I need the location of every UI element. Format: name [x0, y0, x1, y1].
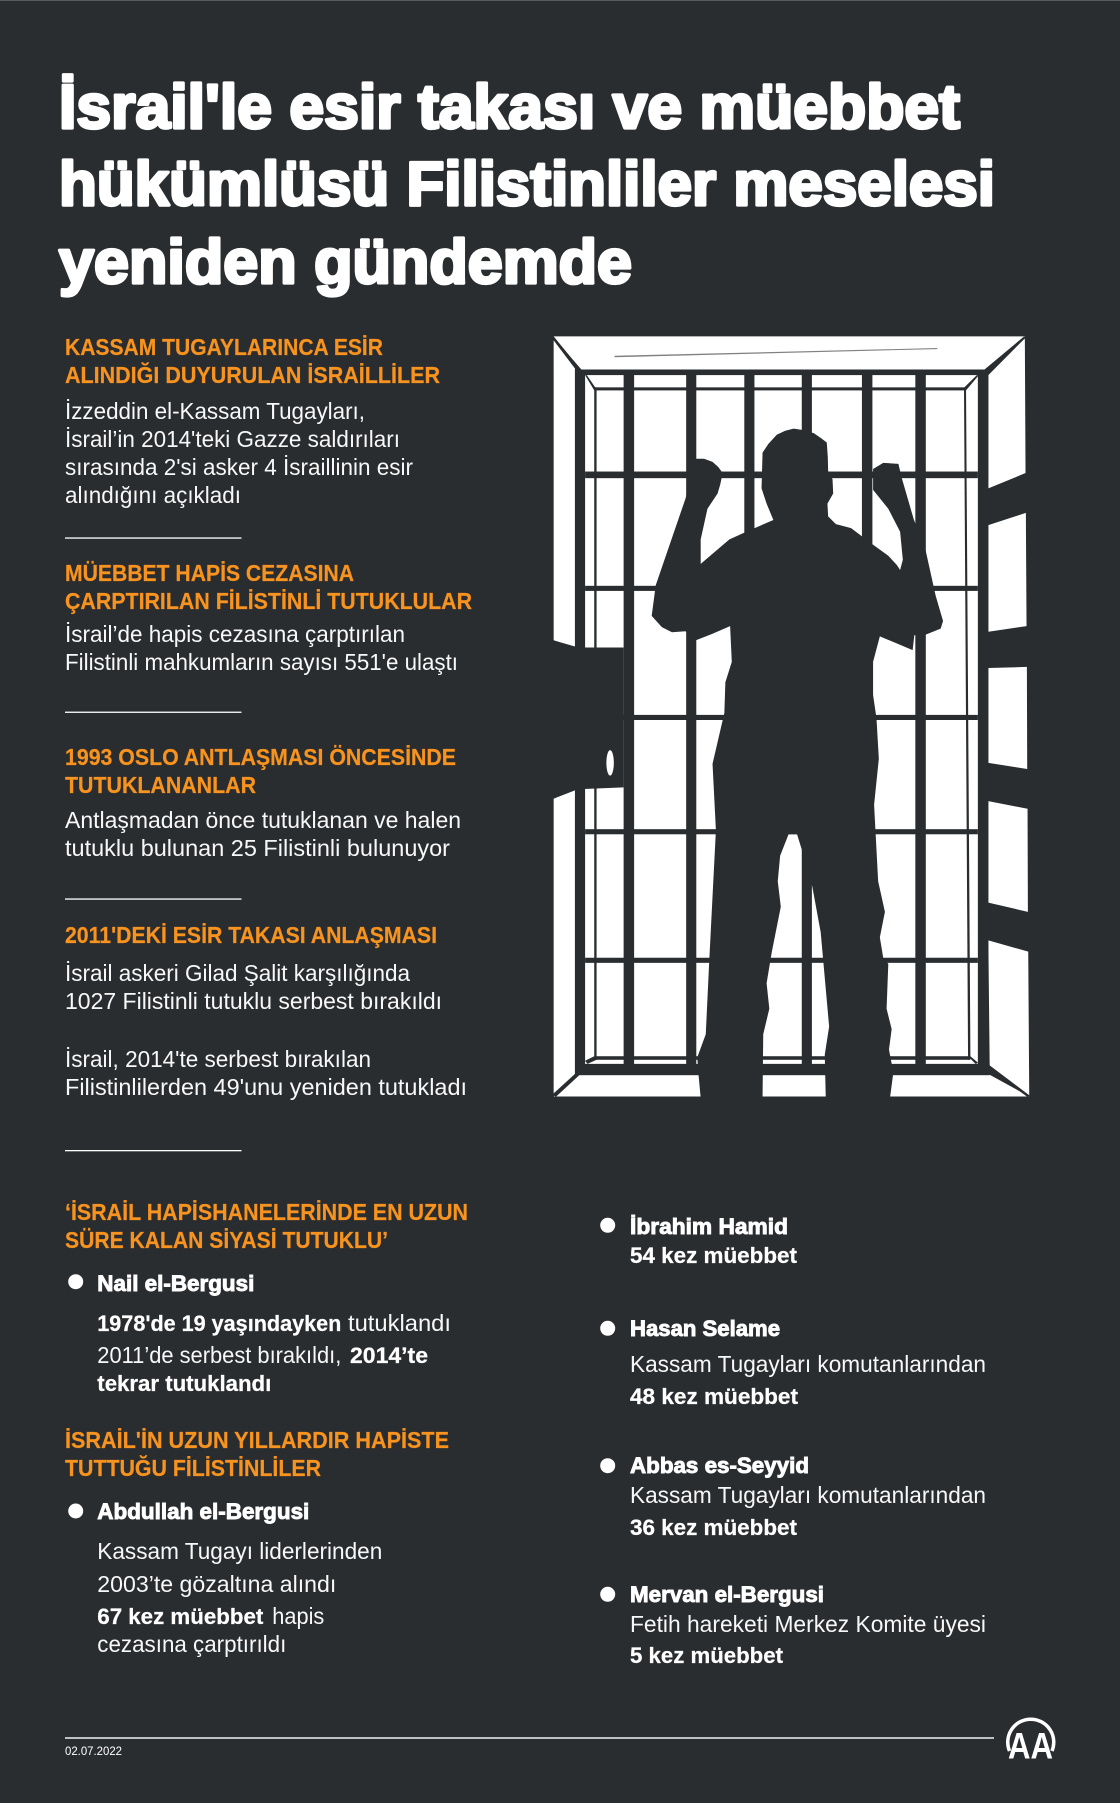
section: life sentences: Filistinli mahkumların sayısı 551'e ulaştı	[65, 649, 458, 675]
entry: İbrahim Hamid: İbrahim Hamid	[630, 1214, 788, 1239]
logo: AA: AA	[1008, 1725, 1053, 1766]
section: longest-held political prisoner: Nail el-Bergusi	[97, 1271, 254, 1296]
entry: Hasan Selame: Kassam Tugayları komutanlarından	[630, 1351, 986, 1377]
entry: Mervan el-Bergusi: 5 kez müebbet	[630, 1643, 783, 1668]
section: 2011 exchange: 1027 Filistinli tutuklu serbest bırakıldı	[65, 988, 442, 1014]
section: life sentences: ÇARPTIRILAN FİLİSTİNLİ TUTUKLULAR	[65, 588, 472, 614]
section: pre-Oslo prisoners: TUTUKLANANLAR	[65, 772, 256, 798]
window reveals	[554, 336, 1029, 1097]
section: life sentences: İsrail’de hapis cezasına çarptırılan	[65, 621, 405, 647]
bars	[585, 371, 979, 1070]
title: hükümlüsü Filistinliler meselesi	[59, 150, 995, 219]
section: long-term prisoners: cezasına çarptırıldı	[97, 1631, 286, 1657]
entry: Abbas es-Seyyid: 36 kez müebbet	[630, 1515, 797, 1540]
entry: İbrahim Hamid	[600, 1214, 797, 1268]
section: pre-Oslo prisoners: tutuklu bulunan 25 Filistinli bulunuyor	[65, 835, 450, 861]
section: 2011 exchange: İsrail, 2014'te serbest bırakılan	[65, 1046, 371, 1072]
section: 2011 exchange	[65, 922, 467, 1151]
bar frame	[575, 369, 988, 1075]
section: Kassam captives: İsrail’in 2014'teki Gazze saldırıları	[65, 426, 400, 452]
entry: Hasan Selame: Hasan Selame	[630, 1316, 780, 1341]
entry: Mervan el-Bergusi: Mervan el-Bergusi	[630, 1582, 824, 1607]
section: longest-held political prisoner	[65, 1199, 468, 1396]
entry: Abbas es-Seyyid	[600, 1453, 986, 1540]
section: Kassam captives	[65, 334, 440, 539]
section: life sentences: MÜEBBET HAPİS CEZASINA	[65, 560, 354, 586]
window panes	[585, 375, 978, 1064]
silhouette	[652, 429, 943, 1098]
section: long-term prisoners: Kassam Tugayı liderlerinden	[97, 1538, 382, 1564]
section: longest-held political prisoner: tutuklandı	[348, 1310, 451, 1336]
footer rule	[65, 1737, 994, 1739]
section: 2011 exchange: İsrail askeri Gilad Şalit karşılığında	[65, 960, 410, 986]
section: longest-held political prisoner: 2014’te	[350, 1343, 428, 1368]
entry: İbrahim Hamid: 54 kez müebbet	[630, 1243, 797, 1268]
section: 2011 exchange: Filistinlilerden 49'unu yeniden tutukladı	[65, 1074, 467, 1100]
section: longest-held political prisoner: 1978'de 19 yaşındayken	[97, 1311, 341, 1336]
section: long-term prisoners: İSRAİL'İN UZUN YILLARDIR HAPİSTE	[65, 1427, 449, 1453]
door lock plate	[551, 639, 624, 799]
section: long-term prisoners: TUTTUĞU FİLİSTİNLİLER	[65, 1454, 321, 1481]
entry: Mervan el-Bergusi: Fetih hareketi Merkez Komite üyesi	[630, 1611, 986, 1637]
reveal corner lines	[553, 336, 1030, 1097]
section: long-term prisoners: 67 kez müebbet	[97, 1604, 264, 1629]
section: 2011 exchange: 2011'DEKİ ESİR TAKASI ANLAŞMASI	[65, 922, 437, 948]
title: İsrail'le esir takası ve müebbet	[59, 73, 960, 142]
section: pre-Oslo prisoners: Antlaşmadan önce tutuklanan ve halen	[65, 807, 461, 833]
section: longest-held political prisoner: 2011’de serbest bırakıldı,	[97, 1342, 341, 1368]
date: 02.07.2022	[65, 1744, 122, 1758]
section: longest-held political prisoner: SÜRE KALAN SİYASİ TUTUKLU’	[65, 1227, 388, 1253]
section: longest-held political prisoner: tekrar tutuklandı	[97, 1371, 271, 1396]
entry: Mervan el-Bergusi	[600, 1582, 986, 1668]
section: pre-Oslo prisoners	[65, 744, 461, 900]
title: yeniden gündemde	[59, 228, 632, 297]
entry: Abbas es-Seyyid: Abbas es-Seyyid	[630, 1453, 809, 1478]
section: Kassam captives: alındığını açıkladı	[65, 482, 241, 508]
section: long-term prisoners: Abdullah el-Bergusi	[97, 1499, 309, 1524]
section: life sentences	[65, 560, 472, 713]
section: long-term prisoners: 2003’te gözaltına alındı	[97, 1571, 336, 1597]
entry: Hasan Selame: 48 kez müebbet	[630, 1384, 798, 1409]
section: Kassam captives: KASSAM TUGAYLARINCA ESİR	[65, 334, 383, 360]
entry: Abbas es-Seyyid: Kassam Tugayları komutanlarından	[630, 1482, 986, 1508]
section: pre-Oslo prisoners: 1993 OSLO ANTLAŞMASI ÖNCESİNDE	[65, 744, 456, 770]
section: long-term prisoners: hapis	[272, 1603, 324, 1629]
title	[59, 73, 995, 297]
section: long-term prisoners	[65, 1427, 449, 1657]
entry: Hasan Selame	[600, 1316, 986, 1409]
lintel scratch line	[615, 348, 937, 357]
section: Kassam captives: ALINDIĞI DUYURULAN İSRAİLLİLER	[65, 361, 440, 388]
section: Kassam captives: sırasında 2'si asker 4 İsraillinin esir	[65, 454, 413, 480]
section: Kassam captives: İzzeddin el-Kassam Tugayları,	[65, 398, 365, 424]
illustration: prisoner behind bars	[551, 336, 1030, 1098]
section: longest-held political prisoner: ‘İSRAİL HAPİSHANELERİNDE EN UZUN	[65, 1199, 468, 1225]
